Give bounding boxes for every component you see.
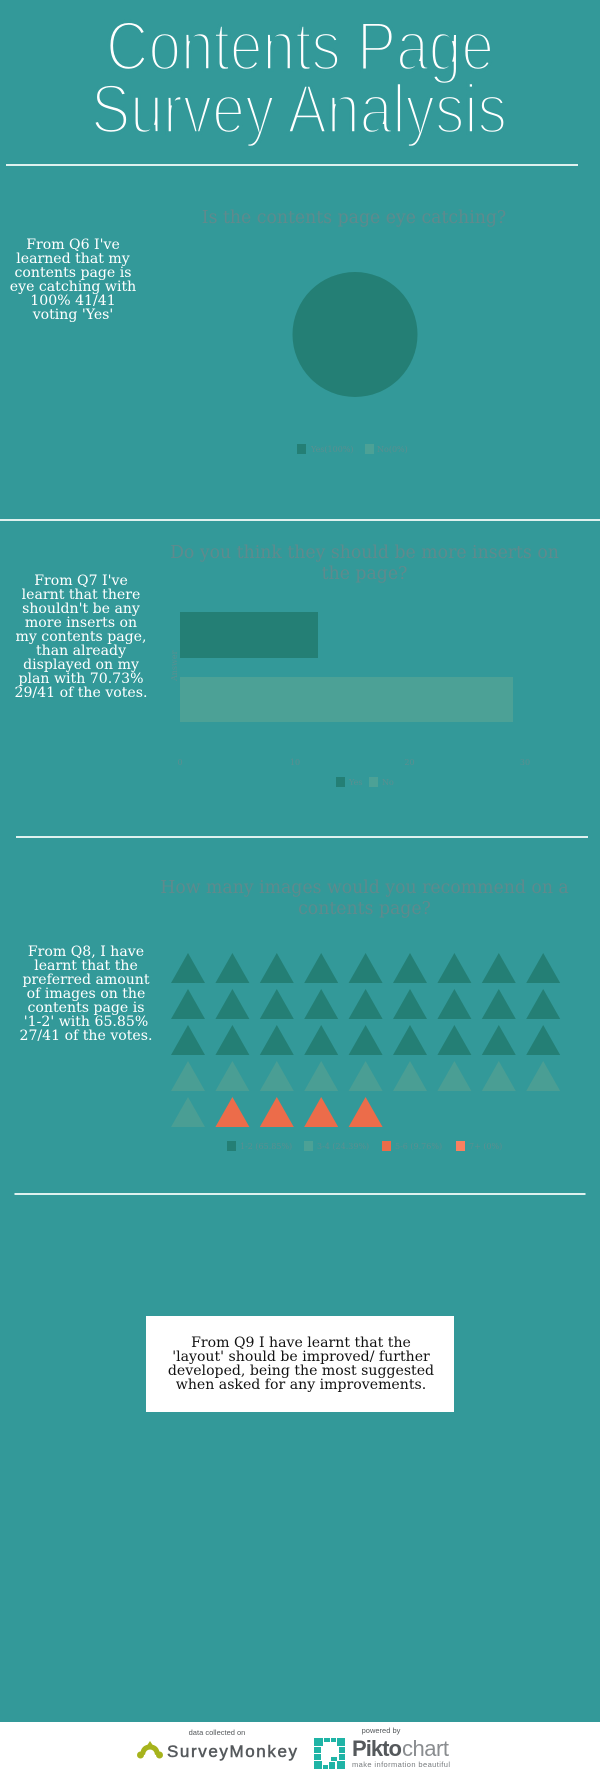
legend: Q8: 5-6 (9.76%) — [395, 1142, 442, 1151]
chart heading: Q7: Do you think they should be more inserts on — [170, 543, 559, 563]
text block: Q7 finding: shouldn't be any — [22, 601, 140, 617]
text block: Q9 finding: developed, being the most suggested — [168, 1363, 434, 1379]
text block: Q8 finding: preferred amount — [22, 972, 150, 988]
icon: Piktochart logo — [314, 1738, 345, 1769]
axis ticks: 20 — [404, 758, 415, 767]
legend: Q7 — [336, 777, 394, 787]
axis ticks: 30 — [520, 758, 530, 767]
text block: Q9 finding — [168, 1335, 434, 1393]
text block: Q6 finding: 100% 41/41 — [30, 293, 116, 309]
icon: SurveyMonkey logo — [137, 1741, 163, 1758]
panel: Q9 callout — [146, 1316, 454, 1412]
text block: Q8 finding: of images on the — [27, 986, 145, 1002]
text block: Q9 finding: From Q9 I have learnt that the — [191, 1335, 411, 1351]
Piktochart credit: chart — [402, 1736, 449, 1761]
legend: Q8: 1-2 (65.85%) — [240, 1142, 292, 1151]
title — [91, 7, 507, 148]
text block: Q8 finding: '1-2' with 65.85% — [24, 1014, 148, 1030]
text block: Q8 finding: From Q8, I have — [28, 944, 144, 960]
Piktochart credit: powered by — [362, 1726, 401, 1735]
text block: Q8 finding: contents page is — [28, 1000, 144, 1016]
title: Survey Analysis — [91, 70, 507, 148]
Piktochart credit: Pikto — [352, 1736, 402, 1761]
text block: Q6 finding: From Q6 I've — [26, 237, 120, 253]
dark triangles: 27 votes — [171, 953, 560, 1055]
legend: Q7: No — [382, 778, 394, 787]
text block: Q7 finding: displayed on my — [23, 657, 139, 673]
text block: Q7 finding: From Q7 I've — [34, 573, 128, 589]
text block: Q7 finding — [14, 573, 148, 701]
Piktochart credit: make information beautiful — [352, 1760, 450, 1769]
text block: Q8 finding: learnt that the — [34, 958, 138, 974]
panel: Q8 images — [19, 878, 569, 1151]
orange triangles: 4 votes — [215, 1097, 383, 1127]
Piktochart credit — [314, 1726, 450, 1769]
legend: Q6 — [297, 444, 408, 454]
text block: Q8 finding — [19, 944, 153, 1044]
SurveyMonkey credit — [137, 1728, 298, 1761]
axis ticks — [177, 758, 530, 767]
panel: Q7 inserts — [14, 543, 559, 787]
bar chart: Q7 — [170, 612, 530, 767]
text block: Q7 finding: learnt that there — [22, 587, 140, 603]
axis label: Answer — [170, 650, 179, 682]
chart heading: Q8 — [160, 878, 569, 919]
text block: Q7 finding: than already — [36, 643, 126, 659]
axis ticks: 10 — [290, 758, 300, 767]
legend: Q6: Yes(100%) — [310, 445, 354, 454]
text block: Q7 finding: more inserts on — [25, 615, 137, 631]
text block: Q6 finding: voting 'Yes' — [32, 307, 113, 323]
bar: No 29 votes — [180, 677, 513, 722]
text block: Q7 finding: plan with 70.73% — [18, 671, 144, 687]
legend: Q8: 3-4 (24.39%) — [317, 1142, 369, 1151]
light triangles: 10 votes — [171, 1061, 560, 1127]
SurveyMonkey credit: SurveyMonkey — [167, 1742, 298, 1761]
SurveyMonkey credit: data collected on — [189, 1728, 245, 1737]
legend: Q8: 7+ (0%) — [469, 1142, 502, 1151]
text block: Q6 finding — [10, 237, 136, 323]
text block: Q9 finding: 'layout' should be improved/ further — [172, 1349, 430, 1365]
text block: Q6 finding: eye catching with — [10, 279, 136, 295]
pie chart: 100% yes — [292, 272, 418, 397]
text block: Q6 finding: contents page is — [15, 265, 131, 281]
footer — [0, 1722, 600, 1782]
text block: Q7 finding: my contents page, — [16, 629, 146, 645]
pictogram chart: triangles — [171, 953, 560, 1127]
bar: Yes 12 votes — [180, 612, 318, 658]
panel: Q6 eye catching — [10, 208, 506, 454]
chart heading: Q8: contents page? — [298, 899, 431, 919]
text block: Q8 finding: 27/41 of the votes. — [19, 1028, 153, 1044]
legend: Q6: No(0%) — [377, 445, 408, 454]
chart heading: Q8: How many images would you recommend on a — [160, 878, 569, 898]
chart heading: Q7 — [170, 543, 559, 584]
title: Contents Page — [106, 7, 494, 85]
chart heading: Q7: the page? — [322, 564, 407, 584]
text block: Q7 finding: 29/41 of the votes. — [14, 685, 148, 701]
text block: Q6 finding: learned that my — [16, 251, 130, 267]
legend: Q7: Yes — [348, 778, 362, 787]
text block: Q9 finding: when asked for any improvements. — [176, 1377, 426, 1393]
legend: Q8 — [227, 1141, 502, 1151]
chart heading: Q6: Is the contents page eye catching? — [202, 208, 506, 228]
axis ticks: 0 — [177, 758, 183, 767]
